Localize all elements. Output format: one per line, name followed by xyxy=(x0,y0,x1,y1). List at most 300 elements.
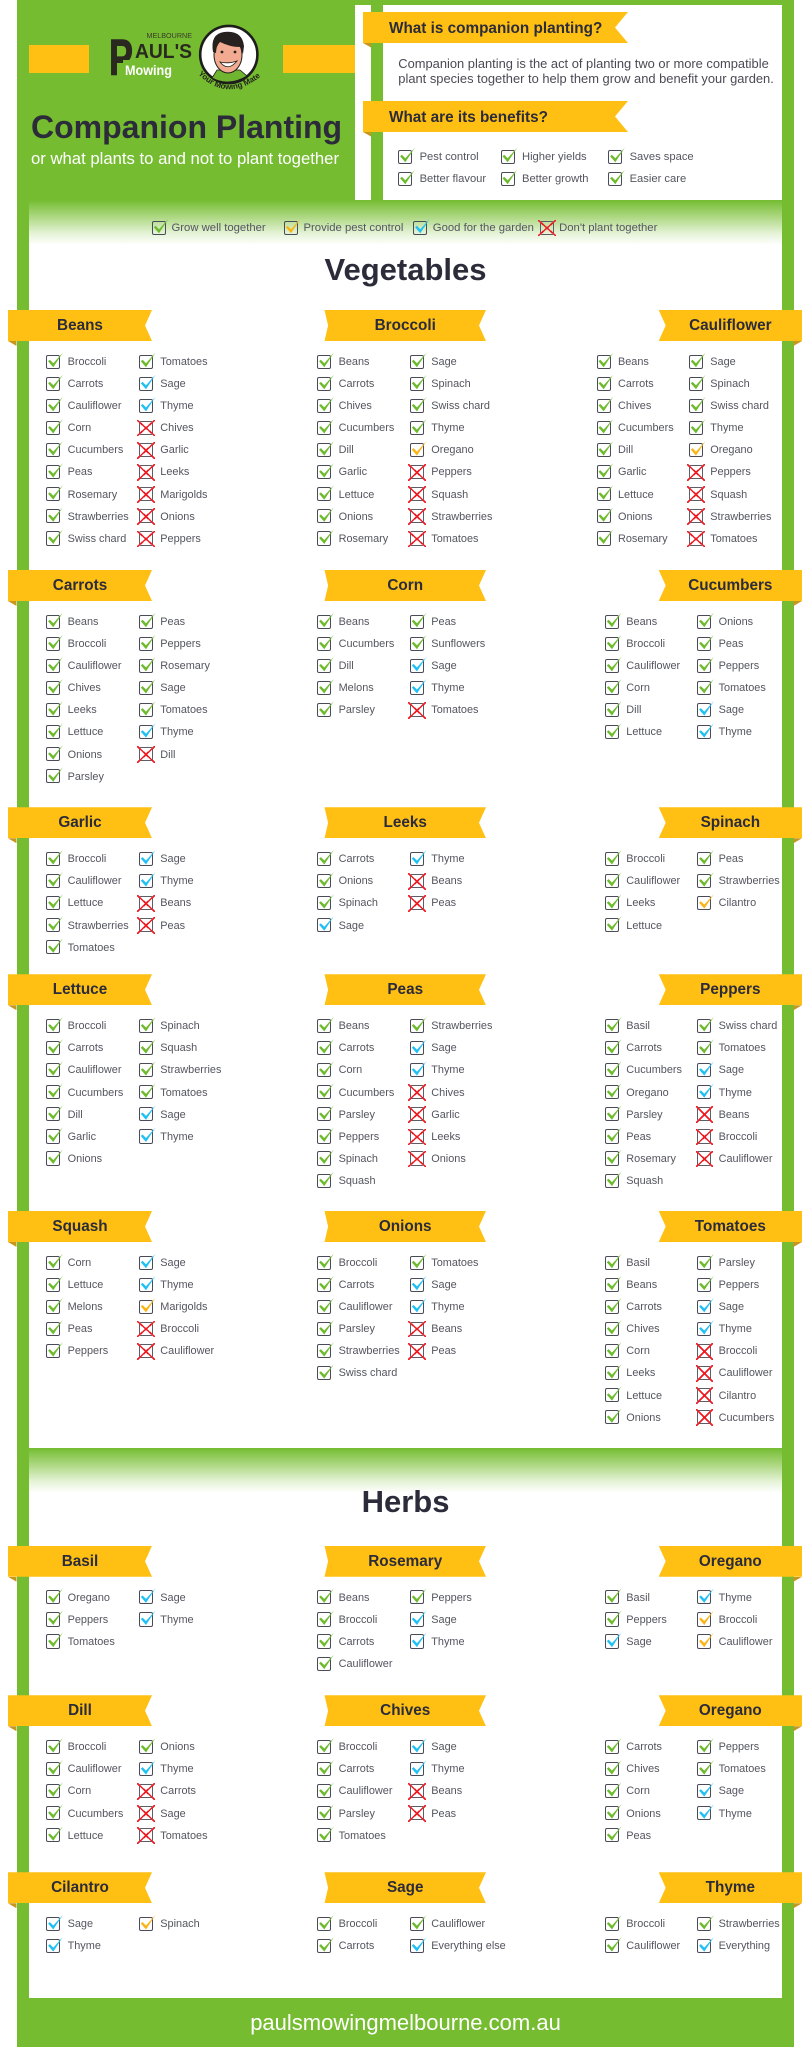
list: Beans column 1: Swiss chard xyxy=(68,533,126,545)
list: Chives column 1 xyxy=(317,1736,392,1847)
list: Tomatoes column 2: Cucumbers xyxy=(719,1412,774,1424)
list: Cauliflower column 1: Cucumbers xyxy=(618,422,674,434)
panel: Thyme xyxy=(605,1872,802,1958)
panel: Beans xyxy=(8,310,208,547)
list: benefits column 2: Better growth xyxy=(522,173,589,185)
list: Basil column 1: Oregano xyxy=(68,1592,110,1604)
list: Corn column 2: Peas xyxy=(431,616,456,628)
list: Tomatoes column 2: Sage xyxy=(719,1301,744,1313)
list: Peas column 1: Corn xyxy=(339,1064,362,1076)
legend: provide pest control: Provide pest control xyxy=(304,222,403,234)
list: Peppers column 1: Carrots xyxy=(626,1042,662,1054)
list: Squash column 2: Marigolds xyxy=(160,1301,208,1313)
list: Chives column 1: Carrots xyxy=(339,1763,374,1775)
list: Peppers column 1: Basil xyxy=(626,1020,650,1032)
list: Tomatoes column 1: Carrots xyxy=(626,1301,662,1313)
list: Oregano column 2 xyxy=(697,1587,772,1653)
list: Peas column 1: Spinach xyxy=(339,1153,378,1165)
list: Lettuce column 2: Sage xyxy=(160,1109,186,1121)
banner: Rosemary: Rosemary xyxy=(368,1553,442,1570)
list: Lettuce column 1: Onions xyxy=(68,1153,102,1165)
list: Cucumbers column 2: Tomatoes xyxy=(719,682,766,694)
list: Tomatoes column 1: Lettuce xyxy=(626,1390,662,1402)
list: benefits column 1: Better flavour xyxy=(420,173,486,185)
panel: what is companion planting xyxy=(383,5,782,200)
list: Cucumbers column 2: Onions xyxy=(719,616,753,628)
list: Beans column 2: Marigolds xyxy=(160,489,208,501)
list: Onions column 1: Parsley xyxy=(339,1323,375,1335)
list: Squash column 2: Broccoli xyxy=(160,1323,199,1335)
list: Dill column 2: Thyme xyxy=(160,1763,194,1775)
list: Onions column 2: Peas xyxy=(431,1345,456,1357)
list: Beans column 1: Corn xyxy=(68,422,91,434)
panel: Chives xyxy=(317,1695,492,1847)
legend: grow well together: Grow well together xyxy=(172,222,266,234)
list: Cauliflower column 1: Dill xyxy=(618,444,633,456)
list: Lettuce column 1: Cucumbers xyxy=(68,1087,123,1099)
list: Carrots column 1: Beans xyxy=(68,616,98,628)
list: Beans column 2: Garlic xyxy=(160,444,189,456)
list: Corn column 1: Beans xyxy=(339,616,369,628)
list: Spinach column 1: Cauliflower xyxy=(626,875,680,887)
list: Peppers column 2: Cauliflower xyxy=(719,1153,772,1165)
list: Spinach column 2: Strawberries xyxy=(719,875,780,887)
panel: Carrots xyxy=(8,570,210,783)
list: Spinach column 2: Peas xyxy=(719,853,743,865)
list: Cauliflower column 1: Carrots xyxy=(618,378,654,390)
list: benefits column 3: Easier care xyxy=(630,173,686,185)
list: Peas column 1: Cucumbers xyxy=(339,1087,394,1099)
list: Leeks column 1: Spinach xyxy=(339,897,378,909)
list: Oregano column 1: Onions xyxy=(626,1808,661,1820)
yellow bar right xyxy=(283,45,355,73)
list: Squash column 1: Peas xyxy=(68,1323,92,1335)
list: Sage column 2: Cauliflower xyxy=(431,1918,485,1930)
logo: Paul's Mowing Melbourne: P xyxy=(109,30,133,87)
list: Peppers column 2: Thyme xyxy=(719,1087,752,1099)
list: Cauliflower column 2: Squash xyxy=(710,489,747,501)
list: Broccoli column 2: Peppers xyxy=(431,466,472,478)
list: Lettuce column 2: Strawberries xyxy=(160,1064,221,1076)
logo: Paul's Mowing Melbourne: Your Mowing Mate xyxy=(200,70,260,90)
list: Chives column 1: Cauliflower xyxy=(339,1785,392,1797)
list: Carrots column 1: Onions xyxy=(68,749,102,761)
list: Cilantro column 1: Thyme xyxy=(68,1940,101,1952)
list: Peas column 2 xyxy=(410,1015,492,1170)
list: Broccoli column 2: Oregano xyxy=(431,444,474,456)
list: Garlic column 1: Strawberries xyxy=(68,920,129,932)
list: Corn column 2: Sunflowers xyxy=(431,638,485,650)
list: Dill column 2: Tomatoes xyxy=(160,1830,208,1842)
list: Carrots column 2: Dill xyxy=(160,749,175,761)
list: Chives column 2: Beans xyxy=(431,1785,462,1797)
banner: Broccoli: Broccoli xyxy=(375,317,436,334)
list: Tomatoes column 2 xyxy=(697,1252,774,1429)
list: Chives column 1: Tomatoes xyxy=(339,1830,386,1842)
banner: Peppers: Peppers xyxy=(700,981,761,998)
list: Oregano column 1: Sage xyxy=(626,1636,652,1648)
list: Leeks column 1 xyxy=(317,850,378,932)
list: Spinach column 2 xyxy=(697,850,780,910)
list: Peas column 2: Sage xyxy=(431,1042,457,1054)
list: Broccoli column 1: Rosemary xyxy=(339,533,388,545)
list: Squash column 1: Corn xyxy=(68,1257,91,1269)
list: Peppers column 2 xyxy=(697,1015,777,1170)
list: Garlic column 2: Beans xyxy=(160,897,191,909)
list: Corn column 2: Thyme xyxy=(431,682,465,694)
banner: Basil: Basil xyxy=(62,1553,98,1570)
list: Oregano column 1: Chives xyxy=(626,1763,660,1775)
list: Squash column 2: Cauliflower xyxy=(160,1345,214,1357)
footer: website: paulsmowingmelbourne.com.au xyxy=(250,2010,561,2035)
list: Carrots column 2: Peas xyxy=(160,616,185,628)
list: Dill column 1: Broccoli xyxy=(68,1741,106,1753)
list: Dill column 2: Sage xyxy=(160,1808,186,1820)
list: Carrots column 2: Tomatoes xyxy=(160,704,208,716)
panel: Cauliflower xyxy=(597,310,802,547)
list: Carrots column 1: Cauliflower xyxy=(68,660,121,672)
list: Onions column 1: Cauliflower xyxy=(339,1301,392,1313)
list: benefits column 1: Pest control xyxy=(420,151,479,163)
list: Beans column 2: Thyme xyxy=(160,400,194,412)
list: Peppers column 1: Parsley xyxy=(626,1109,663,1121)
list: Cauliflower column 1 xyxy=(597,352,674,546)
panel: Corn xyxy=(317,570,486,719)
list: Garlic column 2: Thyme xyxy=(160,875,194,887)
logo: Paul's Mowing Melbourne: AUL'S xyxy=(135,40,192,63)
list: Chives column 2: Thyme xyxy=(431,1763,465,1775)
list: Garlic column 1: Cauliflower xyxy=(68,875,121,887)
text: definition: plant species together to help them grow and benefit your garden. xyxy=(398,71,774,86)
list: Cauliflower column 1: Garlic xyxy=(618,466,646,478)
list: Leeks column 1: Onions xyxy=(339,875,373,887)
list: Tomatoes column 1: Corn xyxy=(626,1345,650,1357)
list: Cucumbers column 1: Cauliflower xyxy=(626,660,680,672)
banner: Garlic: Garlic xyxy=(58,814,102,831)
list: Leeks column 1: Sage xyxy=(339,920,364,932)
banner: Chives: Chives xyxy=(380,1702,430,1719)
list: Broccoli column 1: Garlic xyxy=(339,466,367,478)
list: Peas column 1: Peppers xyxy=(339,1131,379,1143)
list: Spinach column 1: Leeks xyxy=(626,897,655,909)
list: Lettuce column 1 xyxy=(46,1017,123,1166)
list: Peppers column 2: Beans xyxy=(719,1109,749,1121)
list: Peppers column 1: Oregano xyxy=(626,1087,669,1099)
list: Cauliflower column 2: Swiss chard xyxy=(710,400,769,412)
list: Tomatoes column 1: Chives xyxy=(626,1323,660,1335)
list: Oregano column 2: Peppers xyxy=(719,1741,759,1753)
list: Broccoli column 1: Carrots xyxy=(339,378,374,390)
list: Oregano column 1 xyxy=(605,1736,662,1847)
list: Broccoli column 1: Chives xyxy=(339,400,372,412)
list: Lettuce column 2: Thyme xyxy=(160,1131,194,1143)
list: Carrots column 1: Broccoli xyxy=(68,638,106,650)
list: Lettuce column 1: Carrots xyxy=(68,1042,103,1054)
panel: Peas xyxy=(317,974,492,1192)
banner: Corn: Corn xyxy=(387,577,423,594)
list: Beans column 2: Leeks xyxy=(160,466,189,478)
list: Peas column 2: Chives xyxy=(431,1087,465,1099)
list: benefits column 1 xyxy=(398,148,486,186)
list: Beans column 2: Onions xyxy=(160,511,195,523)
list: Oregano column 1: Corn xyxy=(626,1785,650,1797)
list: Carrots column 1: Leeks xyxy=(68,704,97,716)
list: Onions column 2: Thyme xyxy=(431,1301,465,1313)
list: Broccoli column 1: Onions xyxy=(339,511,373,523)
list: Cauliflower column 2: Strawberries xyxy=(710,511,771,523)
list: Peas column 2: Thyme xyxy=(431,1064,465,1076)
list: Cucumbers column 1: Dill xyxy=(626,704,641,716)
list: Tomatoes column 1 xyxy=(605,1252,662,1429)
list: Rosemary column 1: Broccoli xyxy=(339,1614,377,1626)
list: Lettuce column 1: Broccoli xyxy=(68,1020,106,1032)
list: Beans column 2: Sage xyxy=(160,378,186,390)
list: Tomatoes column 1: Beans xyxy=(626,1279,657,1291)
list: Cilantro column 2: Spinach xyxy=(160,1918,200,1930)
list: Carrots column 2: Sage xyxy=(160,682,186,694)
list: Carrots column 1: Lettuce xyxy=(68,726,103,738)
list: Corn column 1: Dill xyxy=(339,660,354,672)
list: Lettuce column 2: Tomatoes xyxy=(160,1087,208,1099)
list: Cauliflower column 2: Tomatoes xyxy=(710,533,758,545)
list: Chives column 2: Sage xyxy=(431,1741,457,1753)
title: Companion Planting xyxy=(31,109,342,145)
list: Carrots column 2: Thyme xyxy=(160,726,194,738)
list: Corn column 1: Parsley xyxy=(339,704,375,716)
list: Rosemary column 1: Beans xyxy=(339,1592,369,1604)
list: Oregano column 2: Broccoli xyxy=(719,1614,757,1626)
list: Beans column 1: Cucumbers xyxy=(68,444,123,456)
list: Thyme column 2 xyxy=(697,1913,780,1957)
list: Dill column 1: Corn xyxy=(68,1785,91,1797)
list: Cucumbers column 1: Lettuce xyxy=(626,726,662,738)
list: Tomatoes column 2: Cauliflower xyxy=(719,1367,772,1379)
logo: Paul's Mowing Melbourne: MELBOURNE xyxy=(146,31,192,40)
list: Corn column 2: Sage xyxy=(431,660,457,672)
list: Cauliflower column 1: Lettuce xyxy=(618,489,654,501)
list: Leeks column 2: Beans xyxy=(431,875,462,887)
list: Basil column 1 xyxy=(46,1587,115,1653)
list: Tomatoes column 2: Thyme xyxy=(719,1323,752,1335)
list: Squash column 1 xyxy=(46,1252,108,1362)
heading: Vegetables: Vegetables xyxy=(324,252,486,287)
list: Garlic column 2 xyxy=(137,850,194,934)
panel: Tomatoes xyxy=(605,1211,802,1429)
panel: Peppers xyxy=(605,974,802,1192)
panel: Garlic xyxy=(8,807,194,954)
list: Lettuce column 1: Cauliflower xyxy=(68,1064,121,1076)
panel: Squash xyxy=(8,1211,208,1363)
list: Peas column 1: Carrots xyxy=(339,1042,374,1054)
panel: Sage xyxy=(317,1872,492,1958)
banner: Oregano: Oregano xyxy=(699,1702,762,1719)
banner: Cucumbers: Cucumbers xyxy=(688,577,772,594)
panel: Oregano (first) xyxy=(605,1546,802,1654)
banner: Oregano: Oregano xyxy=(699,1553,762,1570)
list: Tomatoes column 1: Leeks xyxy=(626,1367,655,1379)
list: Cauliflower column 2: Thyme xyxy=(710,422,744,434)
list: Corn column 1: Cucumbers xyxy=(339,638,394,650)
panel: Spinach xyxy=(605,807,802,932)
yellow bar left xyxy=(29,45,89,73)
list: Dill column 1 xyxy=(46,1736,123,1847)
list: Beans column 1: Rosemary xyxy=(68,489,117,501)
banner: Sage: Sage xyxy=(387,1879,424,1896)
list: Rosemary column 1: Carrots xyxy=(339,1636,374,1648)
list: Cauliflower column 2: Sage xyxy=(710,356,736,368)
list: Sage column 2: Everything else xyxy=(431,1940,506,1952)
list: Sage column 1: Carrots xyxy=(339,1940,374,1952)
list: Spinach column 2: Cilantro xyxy=(719,897,756,909)
list: Garlic column 2: Peas xyxy=(160,920,185,932)
list: Leeks column 2: Peas xyxy=(431,897,456,909)
list: Cucumbers column 2: Peppers xyxy=(719,660,759,672)
banner: Dill: Dill xyxy=(68,1702,92,1719)
list: Chives column 2 xyxy=(410,1736,465,1825)
list: Beans column 1 xyxy=(46,352,129,546)
list: Onions column 1: Broccoli xyxy=(339,1257,377,1269)
list: Onions column 2 xyxy=(410,1252,478,1362)
list: Oregano column 1: Basil xyxy=(626,1592,650,1604)
panel: Onions xyxy=(317,1211,492,1385)
list: Garlic column 1 xyxy=(46,850,129,954)
list: Carrots column 2 xyxy=(137,612,210,763)
list: Cucumbers column 1 xyxy=(605,612,680,739)
list: Tomatoes column 2: Parsley xyxy=(719,1257,755,1269)
list: Onions column 1: Carrots xyxy=(339,1279,374,1291)
list: Squash column 1: Lettuce xyxy=(68,1279,103,1291)
list: Beans column 1: Cauliflower xyxy=(68,400,121,412)
list: Dill column 2: Onions xyxy=(160,1741,195,1753)
list: Peas column 2: Garlic xyxy=(431,1109,460,1121)
list: Cauliflower column 2 xyxy=(687,352,772,547)
list: Oregano column 1: Carrots xyxy=(626,1741,662,1753)
list: Corn column 1: Melons xyxy=(339,682,374,694)
list: Tomatoes column 1: Onions xyxy=(626,1412,661,1424)
list: Garlic column 1: Broccoli xyxy=(68,853,106,865)
list: Thyme column 1: Broccoli xyxy=(626,1918,665,1930)
list: Basil column 2: Sage xyxy=(160,1592,186,1604)
list: Lettuce column 1: Dill xyxy=(68,1109,83,1121)
text: definition: Companion planting is the act of planting two or more compatible xyxy=(398,56,769,70)
banner: Tomatoes: Tomatoes xyxy=(695,1218,766,1235)
list: Oregano column 1: Peppers xyxy=(626,1614,667,1626)
list: Broccoli column 2: Strawberries xyxy=(431,511,492,523)
panel: Cilantro xyxy=(8,1872,208,1958)
list: Broccoli column 2: Tomatoes xyxy=(431,533,478,545)
list: Squash column 2: Sage xyxy=(160,1257,186,1269)
heading: what is companion planting: What is companion planting? xyxy=(389,20,602,37)
list: Broccoli column 2: Sage xyxy=(431,356,457,368)
list: Oregano column 2 xyxy=(697,1736,766,1825)
list: Leeks column 1: Carrots xyxy=(339,853,374,865)
list: Broccoli column 1: Lettuce xyxy=(339,489,374,501)
green fade band: legend xyxy=(29,200,782,245)
banner: Cauliflower: Cauliflower xyxy=(689,317,772,334)
list: Dill column 1: Cucumbers xyxy=(68,1808,123,1820)
list: Rosemary column 2: Sage xyxy=(431,1614,457,1626)
list: Oregano column 1: Peas xyxy=(626,1830,651,1842)
list: Dill column 2: Carrots xyxy=(160,1785,196,1797)
list: Beans column 2 xyxy=(137,352,208,547)
list: Basil column 1: Peppers xyxy=(68,1614,108,1626)
list: Lettuce column 2 xyxy=(139,1017,222,1144)
panel: Cucumbers xyxy=(605,570,802,739)
list: Peas column 1: Squash xyxy=(339,1175,376,1187)
subtitle: or what plants to and not to plant together xyxy=(31,149,339,168)
list: Spinach column 1 xyxy=(605,850,680,932)
list: Basil column 1: Tomatoes xyxy=(68,1636,115,1648)
list: Sage column 1: Broccoli xyxy=(339,1918,377,1930)
list: Corn column 1 xyxy=(317,612,394,717)
list: Peas column 1 xyxy=(317,1015,394,1192)
list: Basil column 2: Thyme xyxy=(160,1614,194,1626)
list: Tomatoes column 2: Peppers xyxy=(719,1279,759,1291)
list: Peas column 1: Parsley xyxy=(339,1109,375,1121)
list: Peppers column 1: Rosemary xyxy=(626,1153,676,1165)
list: Peppers column 2: Sage xyxy=(719,1064,744,1076)
list: Oregano column 2: Tomatoes xyxy=(719,1763,766,1775)
list: Peas column 2: Strawberries xyxy=(431,1020,492,1032)
banner: Carrots: Carrots xyxy=(53,577,107,594)
list: Beans column 1: Peas xyxy=(68,466,92,478)
list: Broccoli column 1 xyxy=(317,352,394,546)
list: Broccoli column 2: Thyme xyxy=(431,422,465,434)
list: Onions column 1: Strawberries xyxy=(339,1345,400,1357)
list: Garlic column 1: Tomatoes xyxy=(68,942,115,954)
legend: don't plant together: Don't plant together xyxy=(559,222,657,234)
list: Rosemary column 1 xyxy=(317,1587,392,1675)
list: Oregano column 1 xyxy=(605,1587,667,1653)
list: Lettuce column 1: Garlic xyxy=(68,1131,96,1143)
list: Sage column 1 xyxy=(317,1913,377,1957)
list: Beans column 2: Peppers xyxy=(160,533,201,545)
list: Chives column 2: Peas xyxy=(431,1808,456,1820)
panel: Dill xyxy=(8,1695,208,1847)
list: Cucumbers column 1: Broccoli xyxy=(626,638,665,650)
panel: Rosemary xyxy=(317,1546,492,1676)
list: Broccoli column 2: Swiss chard xyxy=(431,400,490,412)
list: Beans column 2: Chives xyxy=(160,422,194,434)
list: Peppers column 2: Broccoli xyxy=(719,1131,757,1143)
list: Peppers column 1 xyxy=(605,1015,682,1192)
logo: Paul's Mowing Melbourne: Mowing xyxy=(125,62,172,78)
list: Cucumbers column 2: Thyme xyxy=(719,726,752,738)
list: Cucumbers column 1: Corn xyxy=(626,682,650,694)
list: Beans column 1: Broccoli xyxy=(68,356,106,368)
list: Peppers column 1: Peas xyxy=(626,1131,651,1143)
list: Peppers column 1: Squash xyxy=(626,1175,663,1187)
list: Oregano column 2: Cauliflower xyxy=(719,1636,772,1648)
list: Cauliflower column 1: Onions xyxy=(618,511,652,523)
legend: good for the garden: Good for the garden xyxy=(433,222,534,234)
list: Carrots column 1 xyxy=(46,612,122,783)
list: Thyme column 2: Everything xyxy=(719,1940,770,1952)
list: Onions column 1 xyxy=(317,1252,400,1385)
banner: Cilantro: Cilantro xyxy=(51,1879,109,1896)
list: Lettuce column 2: Squash xyxy=(160,1042,197,1054)
list: Broccoli column 2 xyxy=(408,352,492,547)
list: Cauliflower column 1: Beans xyxy=(618,356,649,368)
list: Beans column 1: Carrots xyxy=(68,378,103,390)
list: Carrots column 1: Parsley xyxy=(68,771,104,783)
text: definition xyxy=(398,56,774,86)
list: Corn column 2: Tomatoes xyxy=(431,704,478,716)
list: Cauliflower column 2: Spinach xyxy=(710,378,750,390)
list: Onions column 2: Beans xyxy=(431,1323,462,1335)
banner: Spinach: Spinach xyxy=(701,814,760,831)
list: Broccoli column 1: Beans xyxy=(339,356,369,368)
